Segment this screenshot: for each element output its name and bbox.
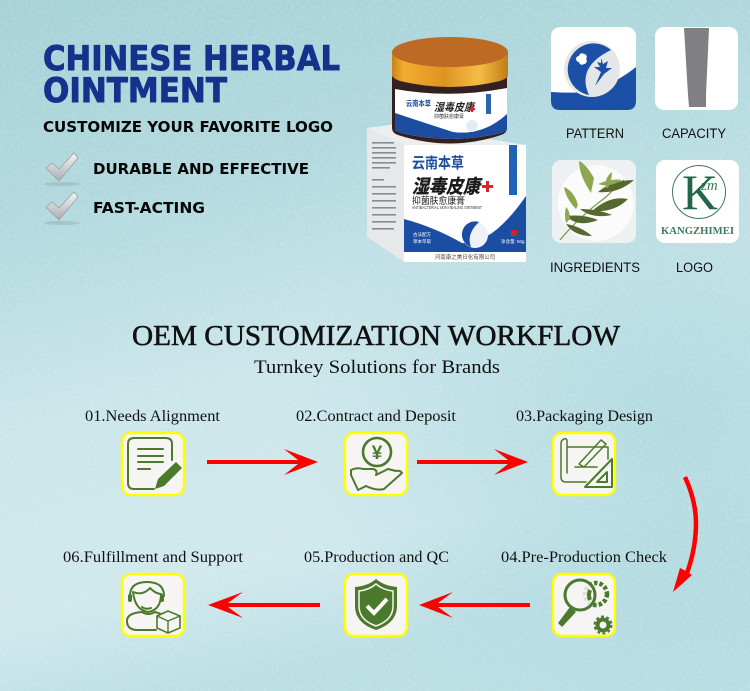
- card: capacity: [655, 27, 738, 110]
- icon: fulfillment and support: [122, 574, 184, 636]
- label: ingredients: INGREDIENTS: [550, 260, 640, 275]
- icon: production and qc: [345, 574, 407, 636]
- title: CHINESE HERBAL: [43, 39, 340, 79]
- feature: durable and effective: DURABLE AND EFFECTIVE: [93, 160, 309, 178]
- box: 湿毒皮康: [412, 176, 483, 198]
- box: 草本萃取: [413, 238, 431, 245]
- box: ANTIBACTERIAL SKIN HEALING OINTMENT: [412, 205, 482, 210]
- card: logo: KANGZHIMEI: [661, 226, 734, 237]
- icon: packaging design: [553, 433, 615, 495]
- arrow: step 1 to 2: [207, 449, 318, 475]
- box: 云南本草: [412, 155, 464, 172]
- label: logo: LOGO: [676, 260, 713, 275]
- subheading: Turnkey Solutions for Brands: [254, 357, 500, 378]
- box: 河南康之美日化有限公司: [435, 253, 495, 261]
- jar: [392, 37, 508, 144]
- jar: 云南本草: [406, 98, 431, 108]
- label: pattern: PATTERN: [566, 126, 624, 141]
- card: logo: [656, 160, 739, 243]
- card: logo: zm: [700, 178, 718, 194]
- step label 3: 03.Packaging Design: [516, 408, 653, 425]
- step label 6: 06.Fulfillment and Support: [63, 549, 244, 566]
- icon: contract and deposit: ¥: [372, 443, 383, 464]
- box: 古法配方: [413, 231, 431, 238]
- title: [43, 39, 340, 111]
- icon: contract and deposit: [345, 433, 407, 495]
- label: capacity: CAPACITY: [662, 126, 726, 141]
- feature: durable and effective: [44, 153, 309, 186]
- arrow: step 4 to 5: [419, 592, 530, 618]
- step label 2: 02.Contract and Deposit: [296, 408, 457, 425]
- step label 1: 01.Needs Alignment: [85, 408, 221, 425]
- icon: needs alignment: [122, 433, 184, 495]
- step label 5: 05.Production and QC: [304, 549, 449, 566]
- subtitle: CUSTOMIZE YOUR FAVORITE LOGO: [43, 118, 333, 136]
- arrow: curve step 3 to 4: [673, 477, 696, 592]
- arrow: step 2 to 3: [417, 449, 528, 475]
- icon: pre-production check: [553, 574, 615, 636]
- product: jar and box: [367, 37, 526, 262]
- step label 4: 04.Pre-Production Check: [501, 549, 667, 566]
- box: 净含量: 50g: [501, 238, 525, 245]
- title: OINTMENT: [43, 71, 228, 111]
- card: pattern: [551, 27, 636, 110]
- jar: 抑菌肤愈康膏: [434, 113, 464, 120]
- jar: 湿毒皮康: [434, 101, 476, 114]
- feature: fast-acting: [44, 192, 205, 225]
- icon: check mark: [44, 153, 80, 186]
- card: ingredients: [552, 160, 636, 243]
- icon: check mark: [44, 192, 80, 225]
- icon: herb branch: [560, 161, 634, 240]
- feature: fast-acting: FAST-ACTING: [93, 199, 205, 217]
- box: [367, 124, 526, 262]
- arrow: step 5 to 6: [208, 592, 320, 618]
- box: 抑菌肤愈康膏: [412, 195, 465, 207]
- heading: workflow: OEM CUSTOMIZATION WORKFLOW: [132, 321, 621, 352]
- card: logo: K: [682, 164, 718, 220]
